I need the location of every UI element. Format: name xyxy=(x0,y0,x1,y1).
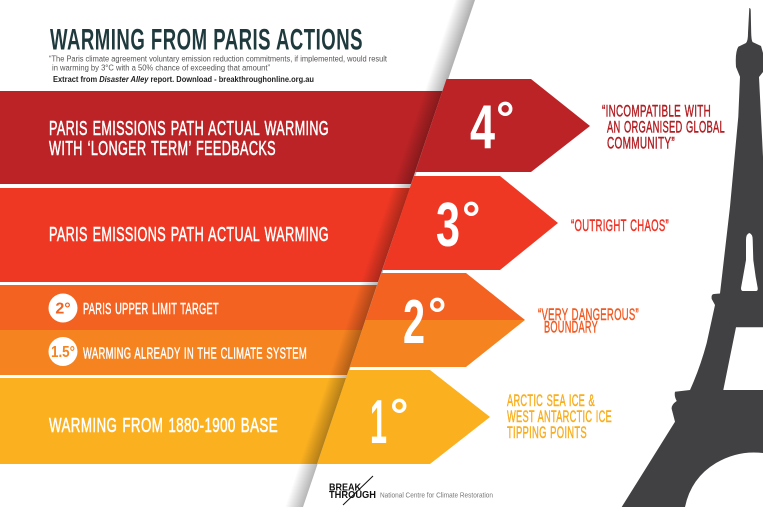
arrow: 4 degrees: ° xyxy=(496,92,514,144)
report source line: Extract from Disaster Alley report. Download - breakthroughonline.org.au xyxy=(53,75,314,84)
logo: Breakthrough: THROUGH xyxy=(329,490,376,501)
logo: Breakthrough: National Centre for Climate Restoration xyxy=(380,492,493,500)
badge: 1.5 degrees xyxy=(48,337,78,366)
icon: Eiffel Tower xyxy=(622,8,763,507)
panel: 2 degree band xyxy=(0,285,377,330)
panel: 4 degree band: PARIS EMISSIONS PATH ACTUAL WARMING xyxy=(49,117,329,140)
arrow: 1 degree xyxy=(317,370,490,464)
label: Paris upper limit: PARIS UPPER LIMIT TARGET xyxy=(83,301,219,318)
logo: Breakthrough: BREAK xyxy=(329,482,362,494)
panel: 3 degree band: PARIS EMISSIONS PATH ACTUAL WARMING xyxy=(49,223,329,246)
arrow: 4 degrees: 4 xyxy=(470,93,495,162)
badge: 2 degrees xyxy=(48,294,78,322)
page fold shadow xyxy=(281,0,475,507)
arrow: 3 degrees: 3 xyxy=(436,191,460,260)
arrow: 2 to 1.5 degrees: ° xyxy=(428,288,446,340)
callout: very dangerous: “VERY DANGEROUS” xyxy=(538,306,639,324)
callout: tipping points: TIPPING POINTS xyxy=(507,424,587,442)
badge: 1.5 degrees: 1.5° xyxy=(51,344,75,361)
arrow: 1 degree: ° xyxy=(390,389,408,441)
callout: tipping points: ARCTIC SEA ICE & xyxy=(507,392,595,410)
callout: tipping points xyxy=(507,392,612,442)
callout: very dangerous: BOUNDARY xyxy=(544,318,598,336)
title: WARMING FROM PARIS ACTIONS xyxy=(50,24,363,56)
panel: 4 degree band xyxy=(0,91,442,184)
arrow: 2 to 1.5 degrees xyxy=(350,273,525,367)
arrow: 1 degree: 1 xyxy=(370,388,387,457)
panel: 1 degree band: WARMING FROM 1880-1900 BASE xyxy=(49,414,278,437)
callout: outright chaos: “OUTRIGHT CHAOS” xyxy=(571,217,669,235)
panel: 1.5 degree band xyxy=(0,330,362,375)
subtitle quote: in warming by 3°C with a 50% chance of exceeding that amount” xyxy=(52,64,270,72)
callout: very dangerous xyxy=(538,306,639,336)
arrow: 4 degrees xyxy=(415,79,590,172)
arrow: 2 to 1.5 degrees: 2 xyxy=(403,288,425,357)
subtitle quote: “The Paris climate agreement voluntary emission reduction commitments, if implemented, would result xyxy=(49,54,388,64)
callout: tipping points: WEST ANTARCTIC ICE xyxy=(507,408,612,426)
panel: 1 degree band xyxy=(0,378,346,464)
callout: incompatible xyxy=(602,102,725,152)
callout: incompatible: COMMUNITY” xyxy=(607,134,675,152)
arrow: 3 degrees: ° xyxy=(462,192,480,244)
label: warming already in system: WARMING ALREADY IN THE CLIMATE SYSTEM xyxy=(83,345,307,362)
badge: 2 degrees: 2° xyxy=(55,300,71,318)
arrow: 3 degrees xyxy=(382,176,558,270)
panel: 3 degree band xyxy=(0,188,410,282)
logo: Breakthrough xyxy=(329,476,493,505)
subtitle quote xyxy=(49,54,388,72)
panel: 4 degree band: WITH ‘LONGER TERM’ FEEDBACKS xyxy=(49,137,276,160)
